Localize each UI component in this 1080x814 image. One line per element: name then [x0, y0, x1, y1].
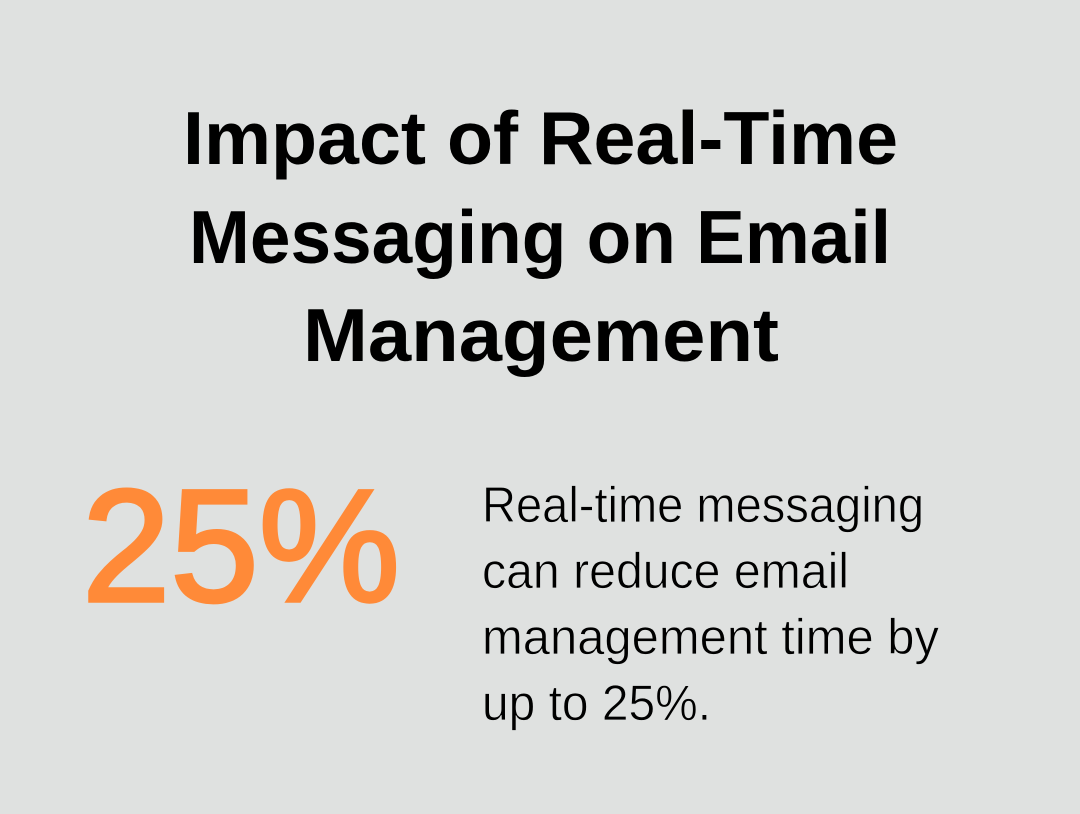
stat description: up to 25%. [482, 675, 711, 731]
stat description: management time by [482, 609, 939, 665]
title: Messaging on Email [189, 195, 891, 279]
stat description: can reduce email [482, 543, 849, 599]
title: Management [303, 293, 779, 377]
title [183, 96, 898, 377]
big stat: 25%: 25% [82, 456, 400, 635]
stat description [482, 477, 939, 731]
stat description: Real-time messaging [482, 477, 924, 533]
title: Impact of Real-Time [183, 96, 898, 180]
